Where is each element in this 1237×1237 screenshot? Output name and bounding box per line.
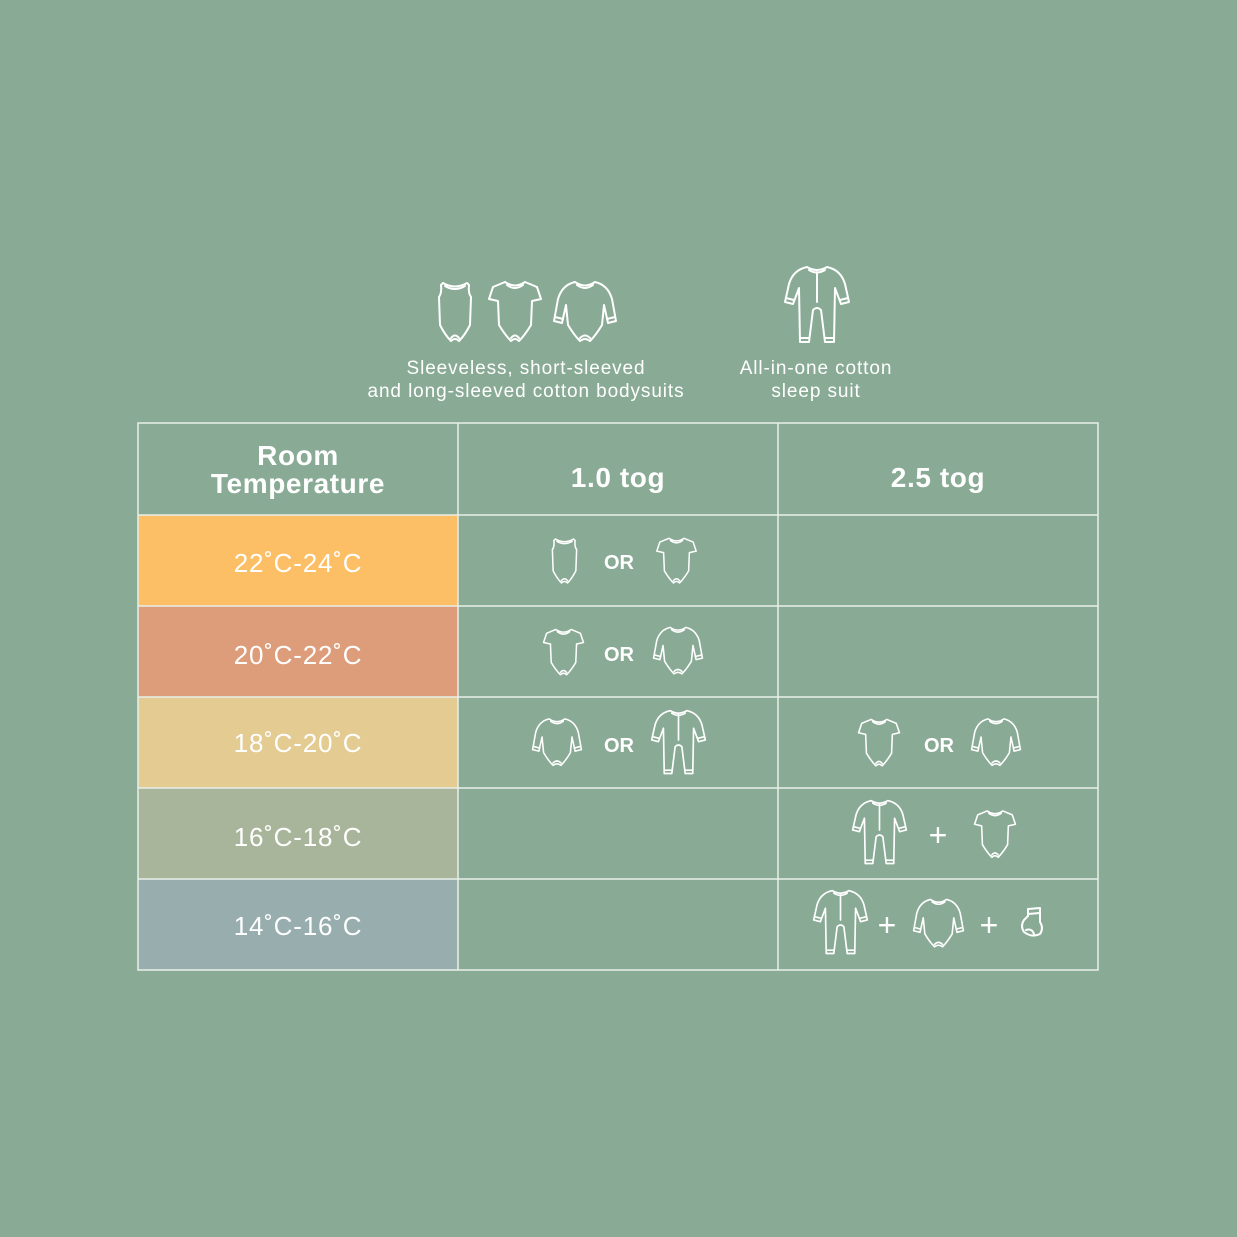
legend: bodysuits	[367, 282, 685, 402]
table	[138, 423, 1098, 970]
temperature cells: 18˚C-20˚C	[234, 728, 362, 758]
temperature cells: 20˚C-22˚C	[234, 640, 362, 670]
legend: bodysuits: and long-sleeved cotton bodysuits	[367, 381, 685, 402]
grid lines	[138, 423, 1098, 970]
header row	[211, 440, 985, 499]
row icons: OR	[604, 735, 635, 757]
row icons: OR	[924, 735, 955, 757]
legend: bodysuits: Sleeveless, short-sleeved	[406, 358, 646, 379]
row icons: OR	[604, 644, 635, 666]
header row: 1.0 tog	[571, 462, 665, 493]
header row: Room	[257, 440, 339, 471]
legend: sleep suit: sleep suit	[771, 381, 861, 402]
legend: sleep suit: All-in-one cotton	[740, 358, 892, 379]
row icons: +	[878, 907, 896, 943]
header row: Temperature	[211, 468, 385, 499]
temperature cells	[138, 515, 458, 970]
row icons: +	[980, 907, 998, 943]
row icons: +	[929, 817, 947, 853]
row icons: OR	[604, 552, 635, 574]
row icons	[533, 538, 1042, 954]
temperature cells: 14˚C-16˚C	[234, 911, 362, 941]
header row: 2.5 tog	[891, 462, 985, 493]
temperature cells: 16˚C-18˚C	[234, 822, 362, 852]
temperature cells: 22˚C-24˚C	[234, 548, 362, 578]
legend: sleep suit	[740, 267, 892, 402]
